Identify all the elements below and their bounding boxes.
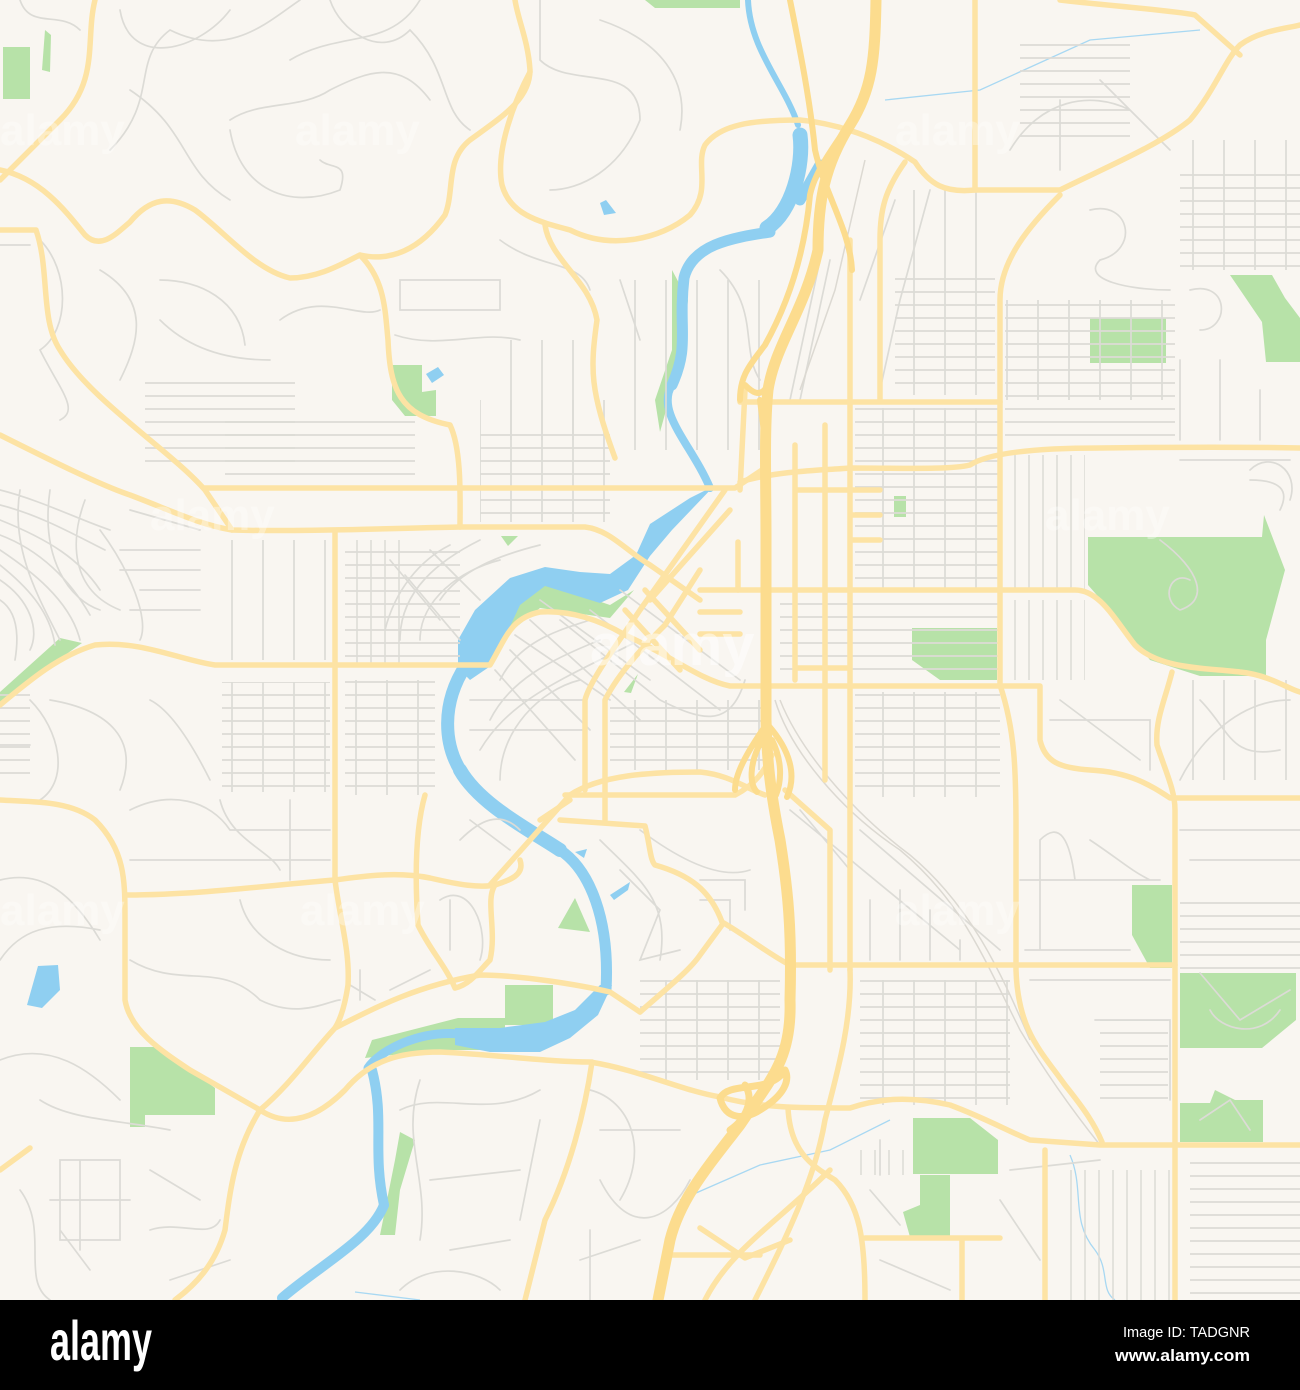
watermark marks: alamy	[150, 491, 275, 540]
watermark marks	[0, 106, 1170, 935]
watermark marks: alamy	[895, 886, 1020, 935]
watermark marks: alamy	[295, 106, 420, 155]
watermark centre: alamy	[590, 613, 754, 678]
watermark marks: alamy	[0, 886, 125, 935]
image id: Image ID: TADGNR	[1123, 1324, 1250, 1341]
watermark marks: alamy	[1045, 491, 1170, 540]
watermark marks: alamy	[300, 886, 425, 935]
lakes	[27, 200, 630, 1008]
streams	[355, 30, 1200, 1300]
logo: alamy	[50, 1309, 152, 1372]
website: www.alamy.com	[1114, 1346, 1250, 1365]
river	[282, 0, 820, 1298]
watermark marks: alamy	[0, 106, 125, 155]
footer bar	[0, 1300, 1300, 1390]
watermark marks: alamy	[895, 106, 1020, 155]
railway lines	[775, 160, 1100, 1145]
freeway	[658, 0, 876, 1300]
